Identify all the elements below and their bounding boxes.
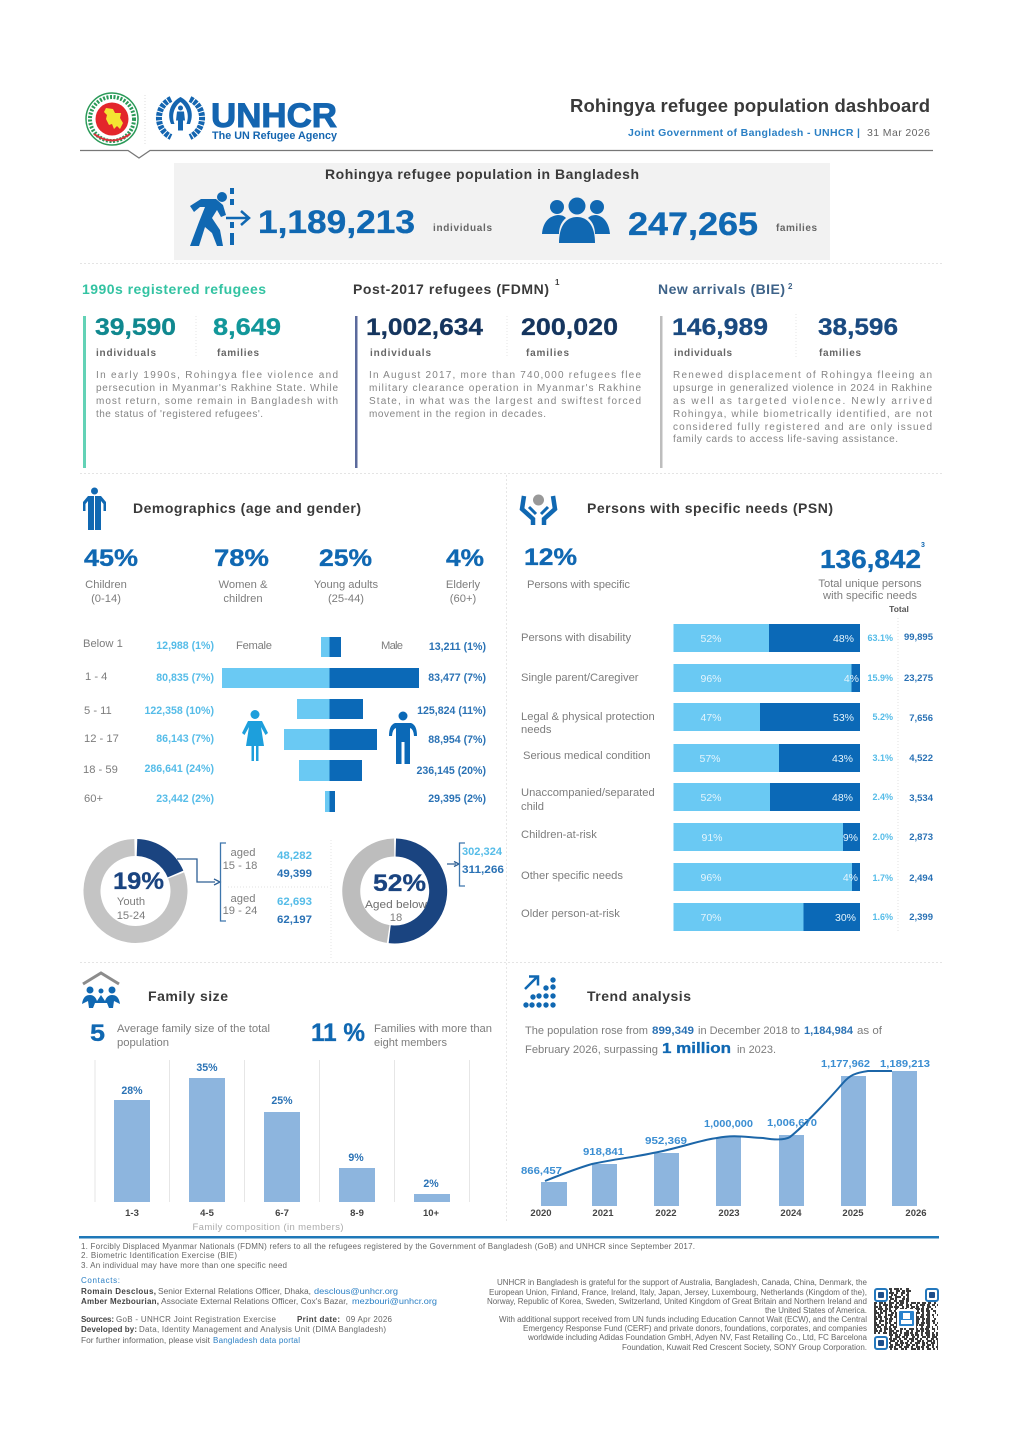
total column: 2,399 bbox=[909, 912, 933, 923]
chart: family composition: 1-3 bbox=[125, 1208, 139, 1219]
stat: elderly: (60+) bbox=[450, 593, 476, 605]
panel: persons with specific needs bbox=[521, 494, 934, 932]
heading: Persons with specific needs (PSN) bbox=[587, 500, 833, 516]
logo: UNHCR: UNHCR bbox=[211, 97, 337, 135]
panel: New arrivals bbox=[658, 281, 932, 468]
footnotes: 1. Forcibly Displaced Myanmar Nationals (FDMN) refers to all the refugees registered by the Government of Bangladesh (GoB) and UNHCR since September 2017. bbox=[81, 1242, 695, 1251]
youth breakdown: 62,693 bbox=[277, 896, 312, 908]
stat: families: families bbox=[526, 348, 569, 359]
total column: 23,275 bbox=[904, 673, 934, 684]
male values bbox=[416, 641, 486, 805]
bar percentages: 52% bbox=[700, 633, 722, 645]
stat: individuals: 39,590 bbox=[95, 314, 176, 341]
chart: population trend: 2026 bbox=[905, 1208, 927, 1219]
youth breakdown: 48,282 bbox=[277, 850, 312, 862]
stat: individuals bbox=[366, 314, 484, 359]
stat: PSN share: 12% bbox=[524, 544, 577, 571]
stat: elderly: Elderly bbox=[446, 579, 481, 591]
stat: average family size: 5 bbox=[90, 1020, 105, 1047]
heading: 1 bbox=[555, 278, 560, 287]
heading: Demographics (age and gender) bbox=[133, 500, 361, 516]
chart: family composition: 6-7 bbox=[275, 1208, 289, 1219]
youth breakdown: aged bbox=[231, 847, 255, 859]
share column: 1.7% bbox=[872, 873, 893, 883]
category labels: Serious medical condition bbox=[523, 750, 650, 762]
panel: demographics bbox=[83, 488, 504, 960]
stat: total PSN: Total unique persons bbox=[818, 578, 922, 590]
description: upsurge in generalized violence in 2024 in Rakhine bbox=[673, 383, 932, 394]
chart: aged below 18 donut: 52% bbox=[373, 870, 426, 897]
chart: family composition: 8-9 bbox=[350, 1208, 364, 1219]
bar percentages: 52% bbox=[700, 792, 722, 804]
acknowledgements: worldwide including Adidas Foundation GmbH, Adyen NV, Fast Retailing Co., Ltd, FC Barcelona bbox=[527, 1333, 868, 1342]
description: In August 2017, more than 740,000 refugees flee bbox=[369, 370, 641, 381]
chart: population pyramid bbox=[83, 637, 486, 812]
total column: 3,534 bbox=[909, 793, 934, 804]
description: considered fully registered and are only issued bbox=[673, 422, 932, 433]
subtitle: Joint Government of Bangladesh - UNHCR | bbox=[628, 127, 860, 139]
icon: person bbox=[83, 488, 106, 530]
stat: children: Children bbox=[85, 579, 127, 591]
icon: rising dots bbox=[523, 976, 556, 1008]
description: movement in the region in decades. bbox=[369, 409, 546, 420]
stat: individuals bbox=[258, 204, 492, 240]
chart: family composition: 10+ bbox=[423, 1208, 440, 1219]
stat: children: 45% bbox=[84, 545, 138, 572]
contacts: Romain Desclous, bbox=[81, 1287, 156, 1296]
description bbox=[369, 370, 641, 420]
stat: families bbox=[818, 314, 898, 359]
stat: average family size: population bbox=[117, 1037, 169, 1049]
sources: Developed by: bbox=[81, 1325, 137, 1334]
stat: families: families bbox=[776, 223, 817, 234]
male values: 236,145 (20%) bbox=[416, 765, 486, 777]
stat: total PSN: Total bbox=[889, 604, 909, 614]
heading: Post-2017 refugees (FDMN) bbox=[353, 281, 549, 297]
bar percentages: 70% bbox=[700, 912, 722, 924]
chart: population trend bbox=[521, 1058, 930, 1219]
age labels: 60+ bbox=[84, 793, 103, 805]
stat: families bbox=[628, 206, 817, 242]
chart: aged below 18 donut: 18 bbox=[390, 912, 402, 924]
stat: total PSN: 3 bbox=[921, 542, 925, 549]
sources: For further information, please visit bbox=[81, 1336, 211, 1345]
chart: PSN stacked bars: 43% bbox=[832, 753, 853, 765]
category labels: needs bbox=[521, 724, 552, 736]
share column: 2.4% bbox=[872, 792, 893, 802]
footnotes: 3. An individual may have more than one specific need bbox=[81, 1261, 287, 1270]
acknowledgements: Foundation, Kuwait Red Crescent Society, SONY Group Corporation. bbox=[622, 1343, 867, 1352]
panel: population summary bbox=[174, 163, 830, 260]
male values: 83,477 (7%) bbox=[428, 672, 486, 684]
contacts: Associate External Relations Officer, Cox's Bazar, bbox=[161, 1297, 348, 1306]
share column bbox=[867, 633, 893, 922]
male values: 29,395 (2%) bbox=[428, 793, 486, 805]
description: State, in what was the largest and swiftest forced bbox=[369, 396, 641, 407]
header rule with notch bbox=[80, 150, 933, 158]
acknowledgements: Emergency Response Fund (CERF) and private donors, foundations, corporates, and companies bbox=[523, 1324, 867, 1333]
description: In early 1990s, Rohingya flee violence and bbox=[96, 370, 338, 381]
stat: families bbox=[521, 314, 618, 359]
category labels: Other specific needs bbox=[521, 870, 623, 882]
stat: young adults: (25-44) bbox=[328, 593, 364, 605]
chart: youth donut: 19% bbox=[113, 868, 164, 895]
logo: UNHCR bbox=[159, 97, 338, 142]
header bbox=[80, 93, 933, 158]
total column: 4,522 bbox=[909, 753, 933, 764]
total column: 2,873 bbox=[909, 832, 933, 843]
share column: 5.2% bbox=[872, 712, 893, 722]
below 18 breakdown: 311,266 bbox=[462, 864, 504, 876]
stat: women and children: children bbox=[223, 593, 263, 605]
description: in 2023. bbox=[737, 1044, 776, 1056]
stat: individuals: individuals bbox=[674, 348, 732, 359]
stat: individuals: individuals bbox=[96, 348, 156, 359]
category labels: Unaccompanied/separated bbox=[521, 787, 655, 799]
stat: elderly bbox=[446, 545, 484, 605]
age labels: 5 - 11 bbox=[84, 705, 112, 717]
age labels: 18 - 59 bbox=[83, 764, 118, 776]
contacts: Contacts: bbox=[81, 1276, 120, 1285]
chart: population trend: 2021 bbox=[592, 1208, 614, 1219]
description bbox=[673, 370, 932, 445]
chart: PSN stacked bars: 4% bbox=[843, 872, 858, 884]
stat: individuals bbox=[672, 314, 768, 359]
panel: family size bbox=[82, 973, 492, 1233]
description: The population rose from bbox=[525, 1025, 648, 1037]
contacts bbox=[81, 1276, 437, 1306]
contacts: Senior External Relations Officer, Dhaka, bbox=[158, 1287, 311, 1296]
stat: women and children: 78% bbox=[214, 545, 269, 572]
total column: 7,656 bbox=[909, 713, 933, 724]
chart: family composition: 35% bbox=[196, 1062, 218, 1074]
age labels bbox=[83, 638, 123, 805]
stat: families: families bbox=[217, 348, 259, 359]
stat: total PSN bbox=[818, 542, 925, 614]
female values: 23,442 (2%) bbox=[156, 793, 214, 805]
chart: youth donut bbox=[92, 848, 179, 934]
share column: 63.1% bbox=[867, 633, 893, 643]
logo: UNHCR: The UN Refugee Agency bbox=[212, 130, 338, 142]
chart: family composition: Family composition (in members) bbox=[192, 1222, 344, 1233]
chart: population trend: 1,006,670 bbox=[767, 1117, 817, 1129]
heading: New arrivals (BIE) bbox=[658, 281, 785, 297]
acknowledgements: Norway, Republic of Korea, Sweden, Switzerland, United Kingdom of Great Britain and Northern Ireland and bbox=[487, 1297, 867, 1306]
chart: family composition: 25% bbox=[271, 1095, 293, 1107]
description: persecution in Myanmar's Rakhine State. While bbox=[96, 383, 338, 394]
description: family cards to access life-saving assistance. bbox=[673, 434, 898, 445]
stat: individuals: 146,989 bbox=[672, 314, 768, 341]
logo: Bangladesh government emblem bbox=[86, 93, 138, 145]
sources: Sources: bbox=[81, 1315, 114, 1324]
footnotes bbox=[81, 1242, 695, 1270]
chart: population trend: 1,189,213 bbox=[880, 1058, 930, 1070]
acknowledgements bbox=[487, 1278, 868, 1352]
chart: aged below 18 donut: Aged below bbox=[365, 899, 428, 911]
stat: individuals: 1,189,213 bbox=[258, 204, 415, 240]
contacts: mezbouri@unhcr.org bbox=[352, 1297, 437, 1306]
bar percentages: 47% bbox=[700, 712, 722, 724]
bar percentages: 91% bbox=[701, 832, 723, 844]
below 18 breakdown bbox=[460, 843, 504, 886]
bar percentages: 57% bbox=[699, 753, 721, 765]
stat: families: 8,649 bbox=[213, 314, 281, 341]
chart: aged below 18 donut bbox=[351, 848, 438, 934]
acknowledgements: UNHCR in Bangladesh is grateful for the support of Australia, Bangladesh, Canada, China, Denmark, the bbox=[497, 1278, 868, 1287]
chart: PSN stacked bars: 9% bbox=[843, 832, 858, 844]
contacts: desclous@unhcr.org bbox=[314, 1287, 398, 1296]
stat: families: 247,265 bbox=[628, 206, 758, 242]
contacts: Amber Mezbourian, bbox=[81, 1297, 159, 1306]
panel: Post-2017 refugees bbox=[353, 278, 641, 468]
total column bbox=[904, 632, 934, 923]
stat: large families: eight members bbox=[374, 1037, 447, 1049]
description bbox=[96, 370, 338, 420]
chart: population trend: 2025 bbox=[842, 1208, 864, 1219]
stat: families: 200,020 bbox=[521, 314, 618, 341]
sources: Bangladesh data portal bbox=[213, 1336, 300, 1345]
subtitle: 31 Mar 2026 bbox=[867, 127, 930, 139]
stat: families: 38,596 bbox=[818, 314, 898, 341]
stat: individuals bbox=[95, 314, 176, 359]
sources bbox=[81, 1315, 393, 1345]
age labels: 1 - 4 bbox=[85, 671, 107, 683]
female values: 86,143 (7%) bbox=[156, 733, 214, 745]
chart: PSN stacked bars: 4% bbox=[844, 673, 859, 685]
QR code bbox=[874, 1289, 938, 1349]
panel: trend analysis bbox=[521, 976, 930, 1219]
stat: women and children: Women & bbox=[219, 579, 268, 591]
share column: 1.6% bbox=[872, 912, 893, 922]
icon: woman bbox=[242, 710, 268, 761]
description: military clearance operation in Myanmar's Rakhine bbox=[369, 383, 641, 394]
heading: 2 bbox=[788, 282, 793, 291]
total column: 2,494 bbox=[909, 873, 934, 884]
age labels: 12 - 17 bbox=[84, 733, 119, 745]
female values: 286,641 (24%) bbox=[144, 763, 214, 775]
stat: young adults: Young adults bbox=[314, 579, 379, 591]
category labels: child bbox=[521, 801, 544, 813]
female values: 80,835 (7%) bbox=[156, 672, 214, 684]
chart: family composition bbox=[95, 1060, 470, 1233]
share column: 15.9% bbox=[867, 673, 893, 683]
stat: PSN share: Persons with specific bbox=[527, 579, 630, 591]
female values: 122,358 (10%) bbox=[144, 705, 214, 717]
youth breakdown: aged bbox=[231, 893, 255, 905]
legend: male: Male bbox=[381, 640, 403, 652]
description: 1 million bbox=[662, 1040, 731, 1057]
icon: person crossing border bbox=[190, 188, 249, 246]
bar percentages: 96% bbox=[700, 872, 722, 884]
heading: Trend analysis bbox=[587, 988, 691, 1004]
age labels: Below 1 bbox=[83, 638, 123, 650]
sources: Print date: bbox=[297, 1315, 340, 1324]
stat: young adults bbox=[314, 545, 379, 605]
title: Rohingya refugee population dashboard bbox=[570, 95, 930, 116]
heading: Rohingya refugee population in Bangladesh bbox=[325, 166, 639, 182]
legend: female: Female bbox=[236, 640, 272, 652]
description: as well as targeted violence. Newly arrived bbox=[673, 396, 932, 407]
chart: population trend: 866,457 bbox=[521, 1165, 562, 1177]
description: 899,349 bbox=[652, 1025, 694, 1037]
stat: PSN share bbox=[524, 544, 630, 591]
acknowledgements: With additional support received from UN funds including Education Cannot Wait (ECW), and the Central bbox=[499, 1315, 867, 1324]
description: Renewed displacement of Rohingya fleeing an bbox=[673, 370, 932, 381]
icon: family under roof bbox=[82, 973, 120, 1008]
stat: families: families bbox=[819, 348, 861, 359]
stat: individuals: 1,002,634 bbox=[366, 314, 484, 341]
chart: PSN stacked bars: 30% bbox=[835, 912, 856, 924]
chart: population trend: 2022 bbox=[655, 1208, 677, 1219]
chart: population trend: 2023 bbox=[718, 1208, 740, 1219]
stat: large families bbox=[311, 1019, 492, 1049]
sources: Data, Identity Management and Analysis Unit (DIMA Bangladesh) bbox=[139, 1325, 386, 1334]
chart: population trend: 918,841 bbox=[583, 1146, 624, 1158]
chart: population trend: 1,000,000 bbox=[704, 1118, 753, 1130]
stat: children bbox=[84, 545, 138, 605]
chart: PSN stacked bars: 48% bbox=[833, 633, 854, 645]
heading: 1990s registered refugees bbox=[82, 281, 266, 297]
male values: 88,954 (7%) bbox=[428, 734, 486, 746]
panel: 1990s registered refugees bbox=[82, 281, 338, 468]
share column: 2.0% bbox=[872, 832, 893, 842]
category labels: Single parent/Caregiver bbox=[521, 672, 639, 684]
description: Rohingya, while biometrically identified, are not bbox=[673, 409, 932, 420]
sources: GoB - UNHCR Joint Registration Exercise bbox=[116, 1315, 277, 1324]
chart: PSN stacked bars bbox=[521, 618, 934, 932]
below 18 breakdown: 302,324 bbox=[462, 846, 502, 858]
chart: population trend: 2024 bbox=[780, 1208, 802, 1219]
total column: 99,895 bbox=[904, 632, 934, 643]
heading: Family size bbox=[148, 988, 228, 1004]
youth breakdown: 19 - 24 bbox=[223, 905, 257, 917]
stat: families bbox=[213, 314, 281, 359]
chart: population trend: 952,369 bbox=[645, 1135, 687, 1147]
acknowledgements: the United States of America. bbox=[765, 1306, 867, 1315]
category labels bbox=[521, 632, 655, 920]
stat: elderly: 4% bbox=[446, 545, 484, 572]
arrow: below 18 breakdown bbox=[447, 862, 459, 866]
stat: total PSN: 136,842 bbox=[820, 544, 921, 574]
chart: population trend: 2020 bbox=[530, 1208, 552, 1219]
icon: man bbox=[389, 712, 417, 764]
male values: 125,824 (11%) bbox=[417, 705, 486, 717]
description: most return, some remain in Bangladesh with bbox=[96, 396, 338, 407]
youth breakdown: 49,399 bbox=[277, 868, 312, 880]
stat: large families: 11 % bbox=[311, 1019, 365, 1047]
stat: large families: Families with more than bbox=[374, 1023, 492, 1035]
female bars bbox=[222, 637, 330, 812]
chart: population trend: 1,177,962 bbox=[821, 1058, 870, 1070]
stat: women and children bbox=[214, 545, 269, 605]
chart: family composition: 28% bbox=[121, 1085, 143, 1097]
bar percentages: 96% bbox=[700, 673, 722, 685]
share column: 3.1% bbox=[872, 753, 893, 763]
stat: average family size: Average family size of the total bbox=[117, 1023, 270, 1035]
description: in December 2018 to bbox=[698, 1025, 800, 1037]
stat: children: (0-14) bbox=[91, 593, 121, 605]
stat: average family size bbox=[90, 1020, 270, 1049]
youth breakdown: 15 - 18 bbox=[223, 860, 257, 872]
category labels: Children-at-risk bbox=[521, 829, 597, 841]
category labels: Older person-at-risk bbox=[521, 908, 620, 920]
icon: group of people bbox=[542, 198, 610, 243]
light segments bbox=[674, 624, 860, 931]
bar percentages bbox=[699, 633, 723, 924]
category labels: Persons with disability bbox=[521, 632, 631, 644]
female values bbox=[144, 640, 214, 805]
chart: family composition: 4-5 bbox=[200, 1208, 215, 1219]
chart: family composition: 9% bbox=[348, 1152, 364, 1164]
dark segments bbox=[760, 624, 860, 931]
footnotes: 2. Biometric Identification Exercise (BIE) bbox=[81, 1251, 237, 1260]
stat: individuals: individuals bbox=[370, 348, 431, 359]
youth breakdown bbox=[220, 843, 330, 926]
description: 1,184,984 bbox=[804, 1025, 853, 1037]
icon: hands holding person bbox=[522, 494, 555, 525]
chart: family composition: 2% bbox=[423, 1178, 439, 1190]
male values: 13,211 (1%) bbox=[429, 641, 486, 653]
female values: 12,988 (1%) bbox=[156, 640, 214, 652]
chart: youth donut: 15-24 bbox=[117, 910, 145, 922]
stat: total PSN: with specific needs bbox=[822, 590, 917, 602]
male bars bbox=[330, 637, 419, 812]
category labels: Legal & physical protection bbox=[521, 711, 655, 723]
arrow: youth breakdown bbox=[177, 859, 220, 885]
stat: individuals: individuals bbox=[433, 223, 492, 234]
description: as of bbox=[857, 1025, 883, 1037]
acknowledgements: European Union, Finland, France, Ireland, Italy, Japan, Jersey, Luxembourg, Netherlands (Kingdom of the), bbox=[489, 1288, 867, 1297]
description: February 2026, surpassing bbox=[525, 1044, 658, 1056]
chart: PSN stacked bars: 48% bbox=[832, 792, 853, 804]
chart: youth donut: Youth bbox=[117, 896, 145, 908]
sources: 09 Apr 2026 bbox=[346, 1315, 393, 1324]
description: the status of 'registered refugees'. bbox=[96, 409, 263, 420]
youth breakdown: 62,197 bbox=[277, 914, 312, 926]
chart: PSN stacked bars: 53% bbox=[833, 712, 854, 724]
description bbox=[525, 1025, 883, 1057]
stat: young adults: 25% bbox=[319, 545, 372, 572]
